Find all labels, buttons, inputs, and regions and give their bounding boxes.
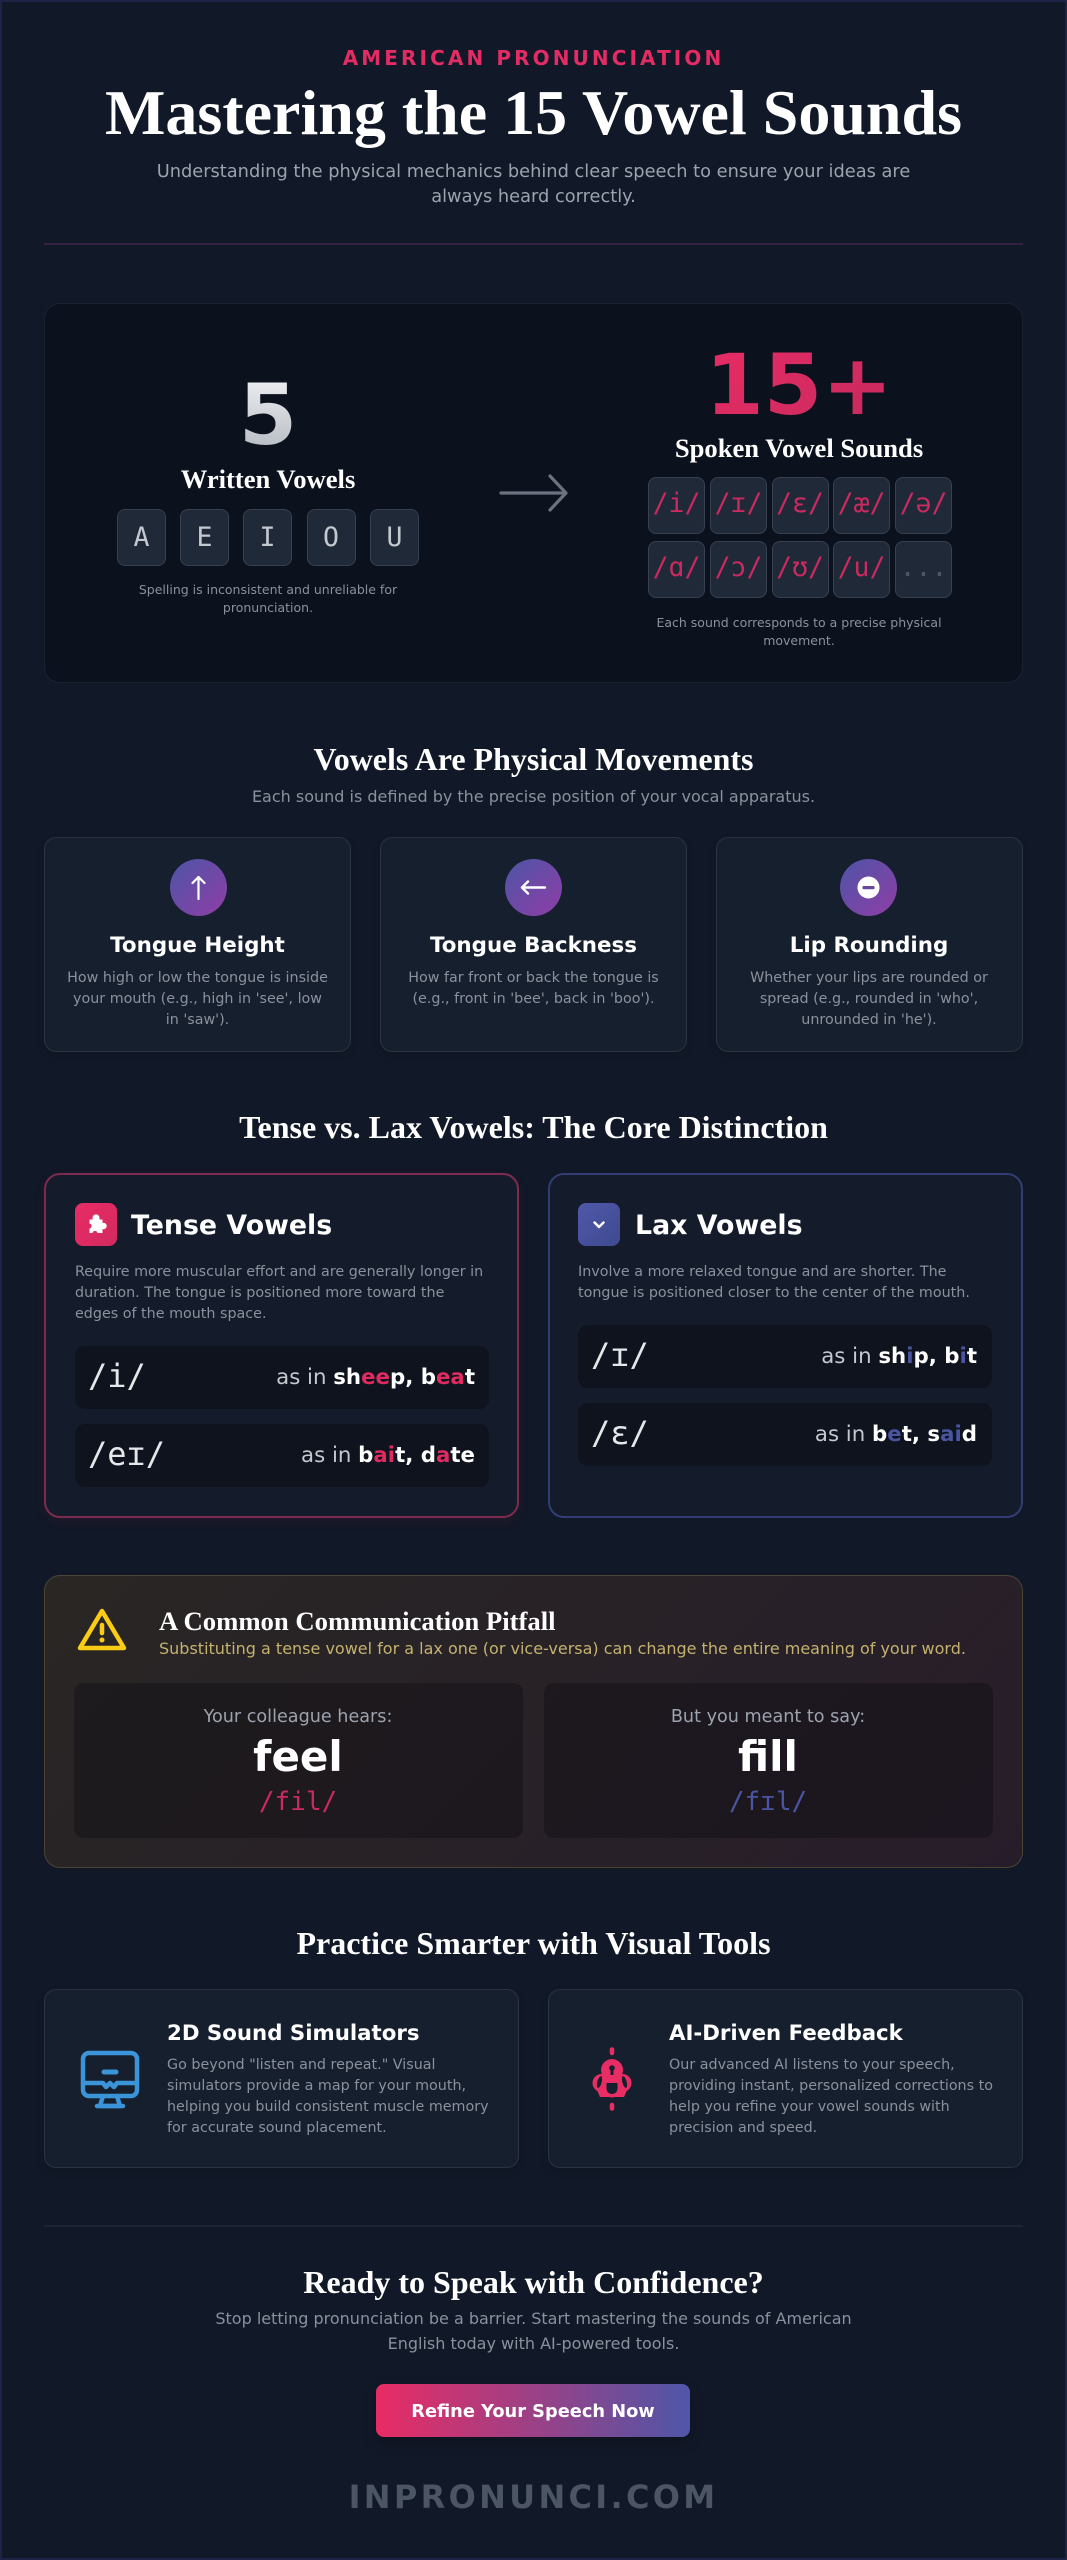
text: /ɔ/	[715, 552, 762, 583]
card: lip rounding	[716, 837, 1023, 1052]
icon: minus circle	[840, 859, 897, 916]
text: /ə/	[900, 488, 947, 519]
text: /ɪ/	[715, 488, 762, 519]
spoken vowels caption	[656, 615, 942, 648]
spoken vowels heading: Spoken Vowel Sounds	[675, 433, 923, 463]
text: lip rounding: Whether your lips are rounded or	[750, 970, 988, 986]
icon: monitor	[80, 2050, 140, 2108]
title: AI-driven feedback: AI-Driven Feedback	[669, 2020, 903, 2046]
ipa: /i/: /i/	[88, 1357, 146, 1395]
ipa: /ɛ/: /ɛ/	[591, 1414, 649, 1452]
text: tongue height: in 'saw').	[166, 1012, 229, 1028]
text: lax vowels: Involve a more relaxed tongue and are shorter. The	[578, 1264, 946, 1280]
text: AI-driven feedback	[669, 2056, 993, 2136]
text: AI-driven feedback: help you refine your vowel sounds with	[669, 2099, 950, 2115]
text: 2D sound simulators: for accurate sound placement.	[167, 2120, 387, 2136]
heading: tense vs lax: Tense vs. Lax Vowels: The Core Distinction	[239, 1109, 828, 1145]
title: tense vowels: Tense Vowels	[131, 1210, 332, 1240]
button: refine your speech	[376, 2384, 690, 2437]
text: 2D sound simulators	[167, 2056, 489, 2136]
panel: written vs spoken	[44, 303, 1023, 683]
text: ...	[900, 552, 947, 583]
spoken vowels caption: Each sound corresponds to a precise physical	[656, 615, 942, 630]
ipa: feel: /fil/	[259, 1787, 337, 1817]
text: tongue backness: (e.g., front in 'bee', back in 'boo').	[412, 991, 655, 1007]
text: A	[134, 522, 149, 553]
example row: /ɪ/	[578, 1325, 992, 1388]
text: lip rounding: spread (e.g., rounded in 'who',	[760, 991, 978, 1007]
heading: call to action: Ready to Speak with Confidence?	[303, 2264, 764, 2300]
icon: chevron down	[578, 1203, 620, 1246]
eyebrow label: AMERICAN PRONUNCIATION	[343, 46, 724, 70]
panel: communication pitfall	[44, 1575, 1023, 1868]
panel: lax vowels	[548, 1173, 1023, 1518]
text: O	[323, 522, 339, 553]
example row: /i/	[75, 1346, 489, 1409]
spoken vowels caption: movement.	[763, 633, 835, 648]
big number 5: 5	[239, 366, 297, 464]
word: fill: fill	[738, 1732, 798, 1781]
example words: bait, date: as in bait, date	[301, 1443, 475, 1468]
written vowel tiles	[117, 509, 419, 566]
example row: /ɛ/	[578, 1403, 992, 1466]
example words: ship, bit: as in ship, bit	[821, 1344, 977, 1369]
subtitle: Understanding the physical mechanics behind clear speech to ensure your ideas are	[157, 160, 910, 182]
example words: bet, said: as in bet, said	[815, 1422, 977, 1447]
title: lip rounding: Lip Rounding	[790, 932, 948, 958]
spoken sound tiles	[648, 477, 952, 598]
written vowels caption: pronunciation.	[223, 600, 313, 615]
ipa: fill: /fɪl/	[729, 1787, 807, 1817]
icon: warning	[78, 1608, 126, 1650]
text: lip rounding	[750, 970, 988, 1028]
title: lax vowels: Lax Vowels	[635, 1210, 803, 1240]
text: /ɛ/	[776, 488, 824, 519]
text: call to action: English today with AI-powered tools.	[388, 2334, 679, 2352]
ipa: /ɪ/: /ɪ/	[591, 1336, 649, 1374]
panel: tense vowels	[44, 1173, 519, 1518]
heading: physical movements: Vowels Are Physical Movements	[314, 741, 753, 777]
text: tongue height: How high or low the tongue is inside	[67, 970, 328, 986]
text: 2D sound simulators: Go beyond "listen and repeat." Visual	[167, 2056, 436, 2072]
label: colleague hears: Your colleague hears:	[204, 1707, 392, 1727]
text: pitfall: Substituting a tense vowel for a lax one (or vice-versa) can change the entire meaning of your word.	[159, 1639, 966, 1658]
title: tongue backness: Tongue Backness	[430, 932, 637, 958]
example words: sheep, beat: as in sheep, beat	[276, 1365, 475, 1390]
text: tongue backness: How far front or back the tongue is	[408, 970, 659, 986]
text: /ɑ/	[653, 552, 700, 583]
text: U	[387, 522, 402, 553]
text: tongue backness	[408, 970, 659, 1007]
text: 2D sound simulators: helping you build consistent muscle memory	[167, 2099, 489, 2115]
text: tense vowels	[75, 1264, 483, 1322]
text: lax vowels	[578, 1264, 970, 1301]
text: tongue height: your mouth (e.g., high in 'see', low	[73, 991, 322, 1007]
subheading: physical movements: Each sound is defined by the precise position of your vocal apparatus.	[252, 787, 815, 806]
title: pitfall: A Common Communication Pitfall	[159, 1606, 556, 1636]
text: call to action	[215, 2308, 852, 2352]
card: tongue height	[44, 837, 351, 1052]
text: AI-driven feedback: Our advanced AI listens to your speech,	[669, 2056, 955, 2072]
button: refine your speech: Refine Your Speech Now	[411, 2401, 655, 2422]
word: feel: feel	[253, 1732, 343, 1781]
text: lip rounding: unrounded in 'he').	[801, 1012, 937, 1028]
text: AI-driven feedback: precision and speed.	[669, 2120, 817, 2136]
text: AI-driven feedback: providing instant, personalized corrections to	[669, 2078, 993, 2094]
ipa: /eɪ/: /eɪ/	[88, 1435, 165, 1473]
heading: practice smarter: Practice Smarter with Visual Tools	[296, 1925, 771, 1961]
text: 2D sound simulators: simulators provide a map for your mouth,	[167, 2078, 466, 2094]
text: /i/	[653, 488, 700, 519]
text: /æ/	[838, 488, 885, 519]
card: tongue backness	[380, 837, 687, 1052]
icon: up arrow	[170, 859, 227, 916]
written vowels caption	[139, 582, 398, 615]
title: 2D sound simulators: 2D Sound Simulators	[167, 2020, 420, 2046]
text: E	[197, 522, 212, 553]
text: tense vowels: Require more muscular effort and are generally longer in	[75, 1264, 483, 1280]
title: tongue height: Tongue Height	[110, 932, 285, 958]
written vowels heading: Written Vowels	[181, 464, 355, 494]
text: tongue height	[67, 970, 328, 1028]
comparison box: feel	[74, 1683, 523, 1838]
icon: puzzle	[75, 1203, 117, 1246]
comparison box: fill	[544, 1683, 993, 1838]
text: /ʊ/	[776, 552, 824, 583]
title: Mastering the 15 Vowel Sounds	[105, 77, 962, 148]
text: /u/	[838, 552, 885, 583]
footer brand: INPRONUNCI.COM	[349, 2478, 718, 2516]
card: 2D sound simulators	[44, 1989, 519, 2168]
example row: /eɪ/	[75, 1424, 489, 1487]
arrow	[499, 474, 568, 512]
text: tense vowels: duration. The tongue is positioned more toward the	[75, 1285, 444, 1301]
text: lax vowels: tongue is positioned closer to the center of the mouth.	[578, 1285, 970, 1301]
icon: left arrow	[505, 859, 562, 916]
label: meant to say: But you meant to say:	[671, 1707, 865, 1727]
text: call to action: Stop letting pronunciation be a barrier. Start mastering the sounds of American	[215, 2308, 852, 2328]
text: I	[260, 522, 275, 553]
big number 15+: 15+	[705, 336, 893, 434]
written vowels caption: Spelling is inconsistent and unreliable for	[139, 582, 397, 597]
subtitle: always heard correctly.	[431, 186, 636, 206]
subtitle	[157, 160, 910, 206]
text: tense vowels: edges of the mouth space.	[75, 1306, 267, 1322]
card: AI-driven feedback	[548, 1989, 1023, 2168]
icon: AI speech	[592, 2047, 632, 2111]
